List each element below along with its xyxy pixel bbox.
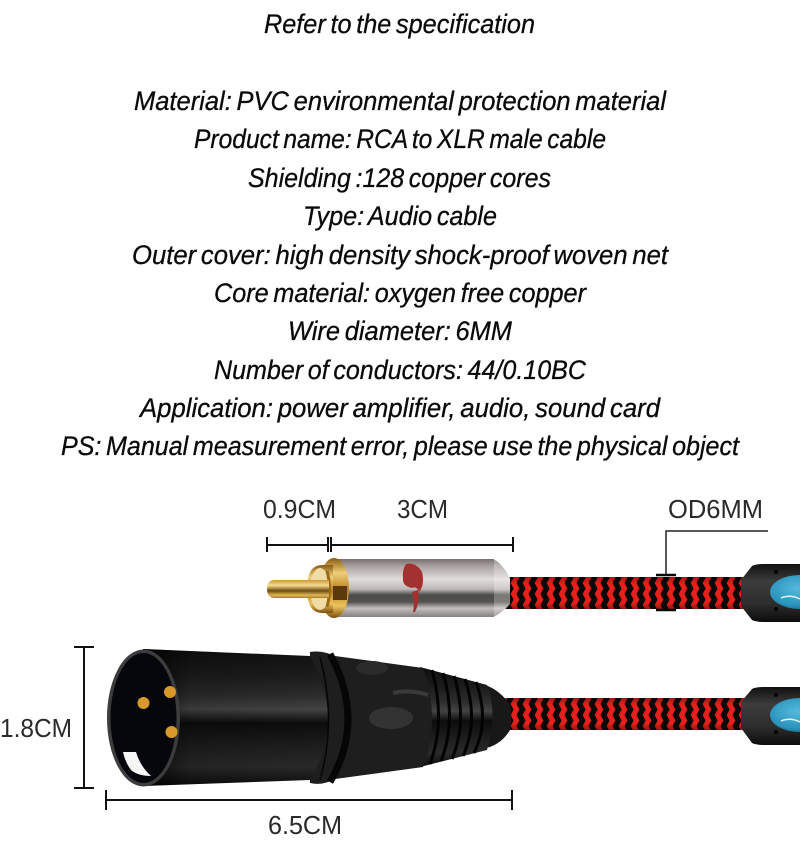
dimension: 0.9CM: 0.9CM bbox=[263, 494, 336, 524]
icon: white key notch bbox=[123, 752, 151, 776]
spec: outer cover: Outer cover: high density shock-proof woven net bbox=[132, 240, 669, 270]
RCA cable and boot bbox=[505, 564, 800, 622]
RCA plug bbox=[267, 558, 510, 618]
spec: material: Material: PVC environmental protection material bbox=[134, 86, 667, 116]
dimension: 6.5CM bbox=[106, 790, 512, 840]
specification list bbox=[61, 86, 740, 461]
strain relief tip bbox=[485, 685, 512, 748]
spec: core material: Core material: oxygen free copper bbox=[214, 278, 587, 308]
dimension: 1.8CM: 1.8CM bbox=[0, 713, 72, 743]
spec: wire diameter: Wire diameter: 6MM bbox=[288, 316, 512, 346]
gold flange bbox=[319, 558, 349, 618]
dimension: 0.9CM bbox=[263, 494, 336, 552]
spec: note on manual measurement: PS: Manual measurement error, please use the physical object bbox=[61, 431, 740, 461]
XLR cable and boot bbox=[500, 687, 800, 745]
icon: red dragon logo bbox=[403, 564, 423, 612]
heading: refer to the specification: Refer to the specification bbox=[264, 9, 535, 39]
ribbed section bbox=[420, 667, 492, 767]
dimension: 3CM: 3CM bbox=[397, 494, 448, 524]
spec: type: Type: Audio cable bbox=[303, 201, 497, 231]
dimension: 6.5CM: 6.5CM bbox=[268, 810, 342, 840]
XLR plug bbox=[107, 649, 512, 786]
face bbox=[107, 650, 180, 786]
dimension: 1.8CM bbox=[0, 647, 94, 788]
spec: number of conductors: Number of conductors: 44/0.10BC bbox=[214, 355, 586, 385]
gold pin bbox=[267, 580, 329, 598]
dimension: OD6MM bbox=[656, 494, 768, 610]
spec: shielding: Shielding :128 copper cores bbox=[248, 163, 551, 193]
spec: application: Application: power amplifier, audio, sound card bbox=[138, 393, 661, 423]
locking collar bbox=[310, 652, 432, 784]
spec: product name: Product name: RCA to XLR male cable bbox=[194, 124, 606, 154]
barrel bbox=[143, 649, 328, 786]
icon: gold pins bbox=[138, 686, 178, 738]
dimension: OD6MM: OD6MM bbox=[668, 494, 763, 524]
gold cup bbox=[307, 565, 333, 613]
dimension: 3CM bbox=[331, 494, 513, 552]
